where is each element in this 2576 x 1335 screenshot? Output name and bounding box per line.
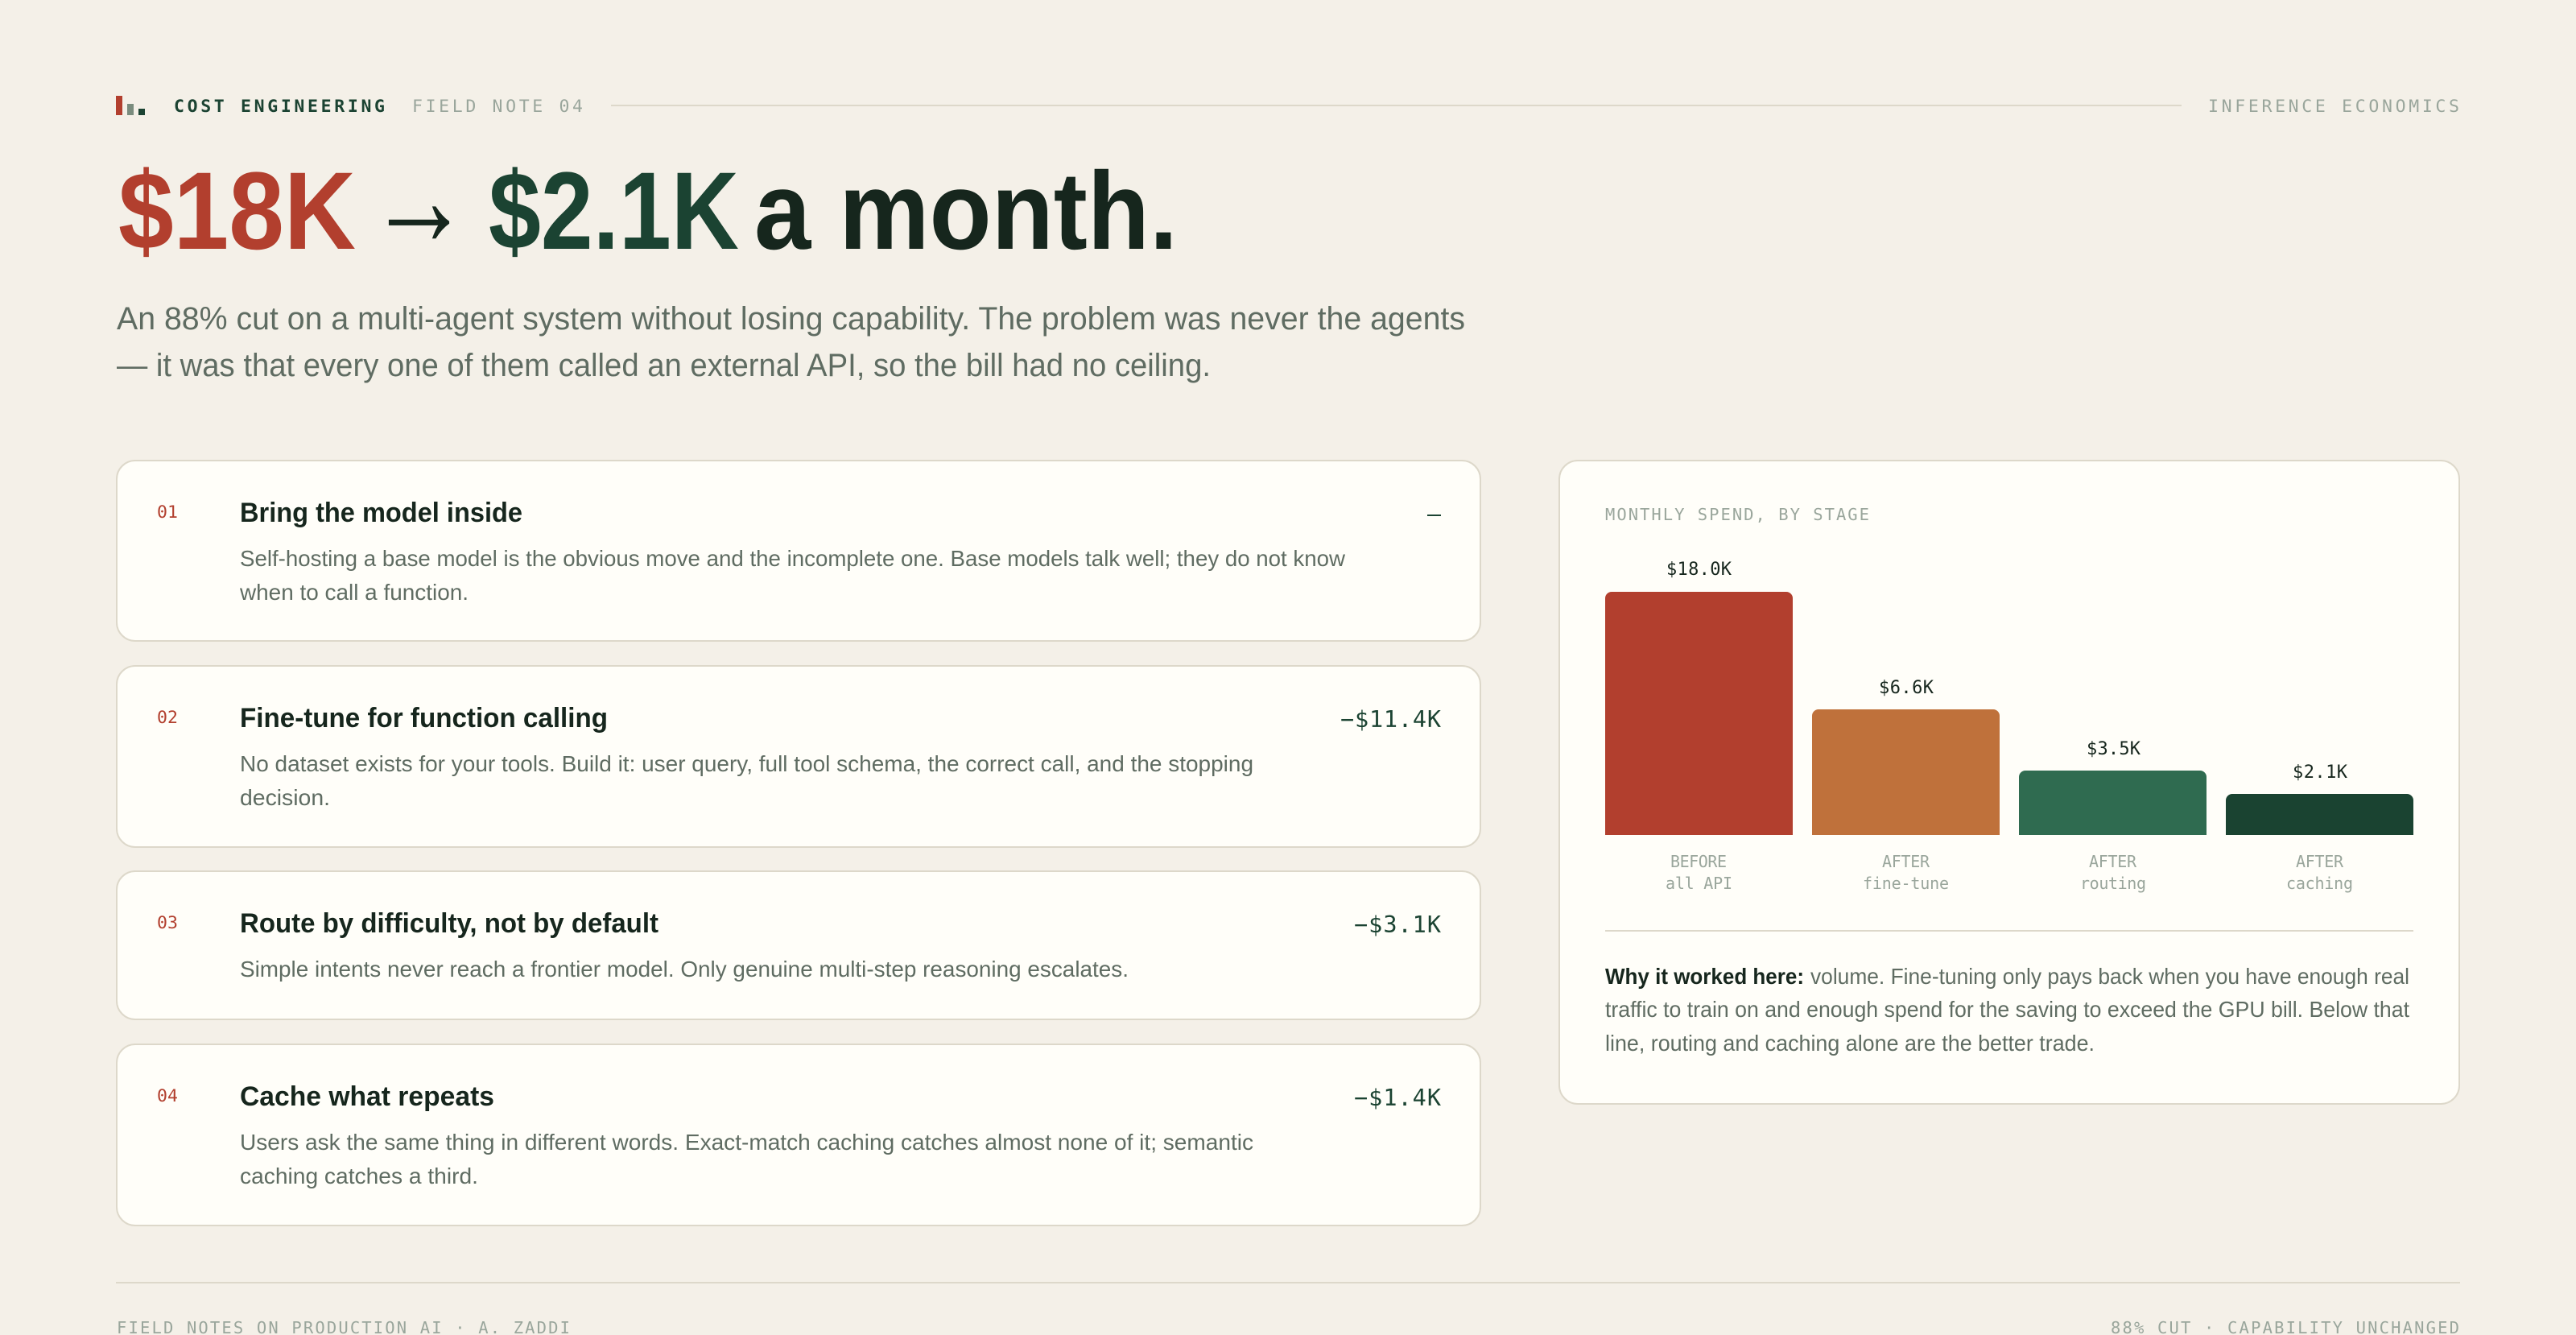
panel: step 04 cache what repeats: caching catches a third. [240, 1163, 478, 1188]
bar chart [1605, 560, 2413, 893]
panel: step 02 fine-tune for function calling: −$11.4K [1340, 706, 1442, 733]
panel: monthly spend chart [1559, 461, 2459, 1104]
title [118, 122, 1178, 275]
title: a month. [754, 150, 1178, 273]
subtitle: An 88% cut on a multi-agent system without losing capability. The problem was never the agents [117, 301, 1465, 337]
bar: after fine-tune: fine-tune [1863, 874, 1949, 893]
title: → [368, 122, 470, 275]
text: why it worked here: volume. Fine-tuning only pays back when you have enough real [1810, 964, 2409, 989]
text: why it worked here: traffic to train on and enough spend for the saving to exceed the GPU bill. Below that [1605, 997, 2409, 1022]
panel: step 02 fine-tune for function calling: Fine-tune for function calling [240, 703, 608, 734]
panel: step 04 cache what repeats: Users ask the same thing in different words. Exact-match caching catches almost none of it; semantic [240, 1130, 1253, 1155]
bar: after caching: AFTER [2296, 852, 2344, 871]
footer [116, 1282, 2460, 1335]
panel: step 02 fine-tune for function calling [117, 666, 1480, 847]
header strip [116, 96, 2459, 117]
text: why it worked here [1605, 964, 2409, 1056]
kicker: field note: FIELD NOTE 04 [412, 97, 583, 117]
panel: step 03 route by difficulty: 03 [157, 913, 178, 933]
title: $18K [118, 150, 356, 273]
bar: after fine-tune: $6.6K [1879, 678, 1934, 698]
bar: after caching: caching [2286, 874, 2353, 893]
panel: step 04 cache what repeats: 04 [157, 1086, 178, 1106]
panel: step 03 route by difficulty [117, 871, 1480, 1019]
panel: step 03 route by difficulty: Route by difficulty, not by default [240, 908, 658, 939]
bar: after fine-tune: AFTER [1882, 852, 1930, 871]
panel: step 04 cache what repeats: −$1.4K [1354, 1085, 1442, 1111]
text: why it worked here: line, routing and caching alone are the better trade. [1605, 1031, 2095, 1056]
subtitle [117, 301, 1465, 383]
kicker: cost engineering: COST ENGINEERING [174, 97, 385, 117]
panel: step 02 fine-tune for function calling: No dataset exists for your tools. Build it: user query, full tool schema, the correct call, and the stopping [240, 751, 1253, 776]
icon: mini bar logo [116, 96, 145, 115]
panel: step 01 bring the model inside: Self-hosting a base model is the obvious move and the incomplete one. Base models talk well; they do not know [240, 546, 1346, 571]
panel: step 04 cache what repeats [117, 1044, 1480, 1225]
panel: step 03 route by difficulty: Simple intents never reach a frontier model. Only genuine multi-step reasoning escalates. [240, 957, 1129, 982]
subtitle: — it was that every one of them called an external API, so the bill had no ceiling. [117, 348, 1211, 383]
panel: step 02 fine-tune for function calling: 02 [157, 708, 178, 728]
bar: before all API: all API [1666, 874, 1732, 893]
bar: before all API: $18.0K [1666, 560, 1732, 580]
panel: step 01 bring the model inside: — [1427, 501, 1442, 527]
panel: step 01 bring the model inside: 01 [157, 502, 178, 523]
title: $2.1K [489, 150, 739, 273]
bar: after caching [2226, 763, 2413, 893]
panel: step 03 route by difficulty: −$3.1K [1354, 911, 1442, 938]
chart heading: MONTHLY SPEND, BY STAGE [1605, 505, 1869, 524]
bar: before all API [1605, 560, 1793, 893]
bar: after caching: $2.1K [2293, 763, 2348, 783]
panel: step 02 fine-tune for function calling: decision. [240, 785, 330, 810]
panel: step 01 bring the model inside: when to call a function. [239, 580, 469, 605]
panel: step 04 cache what repeats: Cache what repeats [240, 1081, 494, 1112]
kicker: inference economics: INFERENCE ECONOMICS [2208, 97, 2459, 117]
bar: after routing: AFTER [2089, 852, 2137, 871]
panel: step 01 bring the model inside [117, 461, 1480, 641]
text: why it worked here: Why it worked here: [1605, 964, 1804, 989]
bar: after fine-tune [1812, 678, 2000, 893]
bar: before all API: BEFORE [1670, 852, 1727, 871]
bar: after routing [2019, 739, 2207, 893]
bar: after routing: $3.5K [2087, 739, 2141, 759]
panel: step 01 bring the model inside: Bring the model inside [240, 498, 522, 528]
bar: after routing: routing [2080, 874, 2146, 893]
